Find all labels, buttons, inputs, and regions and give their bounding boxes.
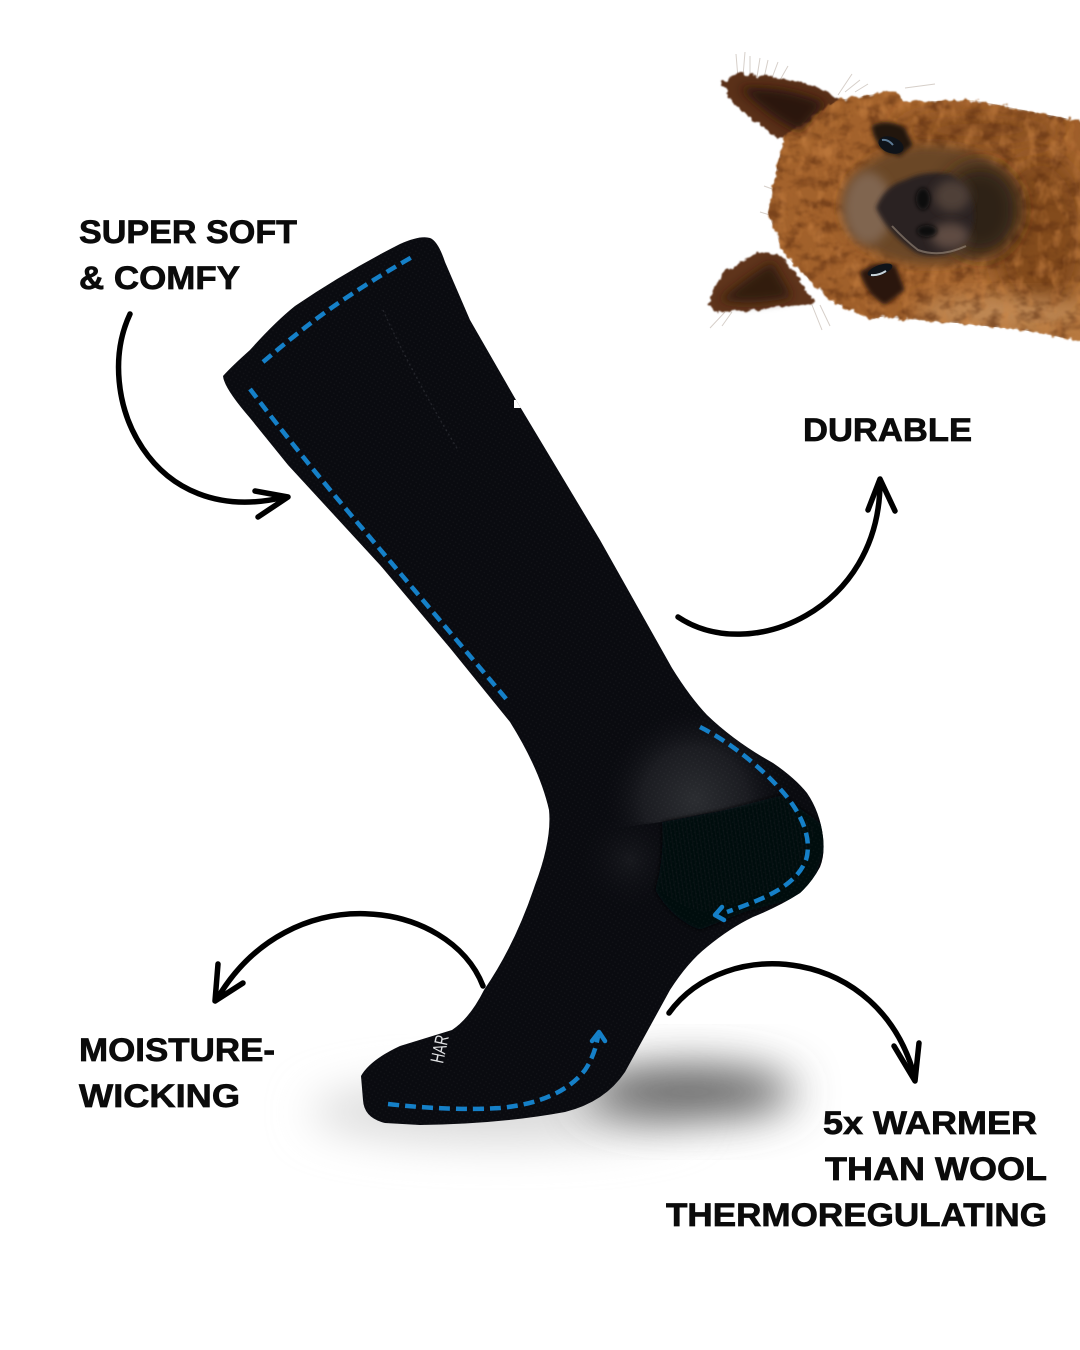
arrow: moisture-wicking <box>215 914 483 1001</box>
ankle panel <box>630 714 776 824</box>
cuff seam highlight <box>383 310 458 450</box>
sock <box>210 225 830 1135</box>
label: super soft and comfy: SUPER SOFT <box>79 214 297 250</box>
blue dashed line: cuff <box>263 256 414 362</box>
arrow: durable <box>678 479 895 634</box>
label: moisture-wicking: MOISTURE- <box>79 1032 275 1068</box>
arrow: super soft <box>119 314 288 517</box>
label: warmer than wool, thermoregulating: THERMOREGULATING <box>666 1197 1047 1233</box>
label: super soft and comfy: & COMFY <box>79 260 240 296</box>
alpaca inner ear shading <box>720 88 825 302</box>
alpaca eyes <box>860 122 913 305</box>
label: durable: DURABLE <box>803 412 972 448</box>
label: warmer than wool, thermoregulating: THAN WOOL <box>825 1151 1047 1187</box>
knit texture <box>210 225 830 1135</box>
blue dashed arrow: toe <box>388 1032 605 1109</box>
label: moisture-wicking <box>79 1032 275 1114</box>
alpaca nose <box>876 173 974 256</box>
blue dashed arrow: heel <box>700 727 808 920</box>
alpaca ears and body fur <box>708 73 1080 342</box>
label: super soft and comfy <box>79 214 297 296</box>
heel cushioning <box>655 795 830 930</box>
sock toe logo: HAR <box>427 1033 454 1065</box>
alpaca muzzle <box>842 145 1020 265</box>
side panel <box>618 848 641 872</box>
label: warmer than wool, thermoregulating: 5x WARMER <box>823 1105 1037 1141</box>
sock shadow <box>310 1066 795 1142</box>
arrow: warmer <box>669 964 919 1081</box>
heel ribs <box>658 795 815 912</box>
alpaca photo illustration <box>708 52 1080 345</box>
label: warmer than wool, thermoregulating <box>666 1105 1047 1233</box>
blue dashed line: calf <box>250 389 508 701</box>
alpaca stray hairs <box>710 52 935 330</box>
white nick <box>514 400 521 408</box>
alpaca fur texture <box>765 85 1080 345</box>
label: moisture-wicking: WICKING <box>79 1078 240 1114</box>
